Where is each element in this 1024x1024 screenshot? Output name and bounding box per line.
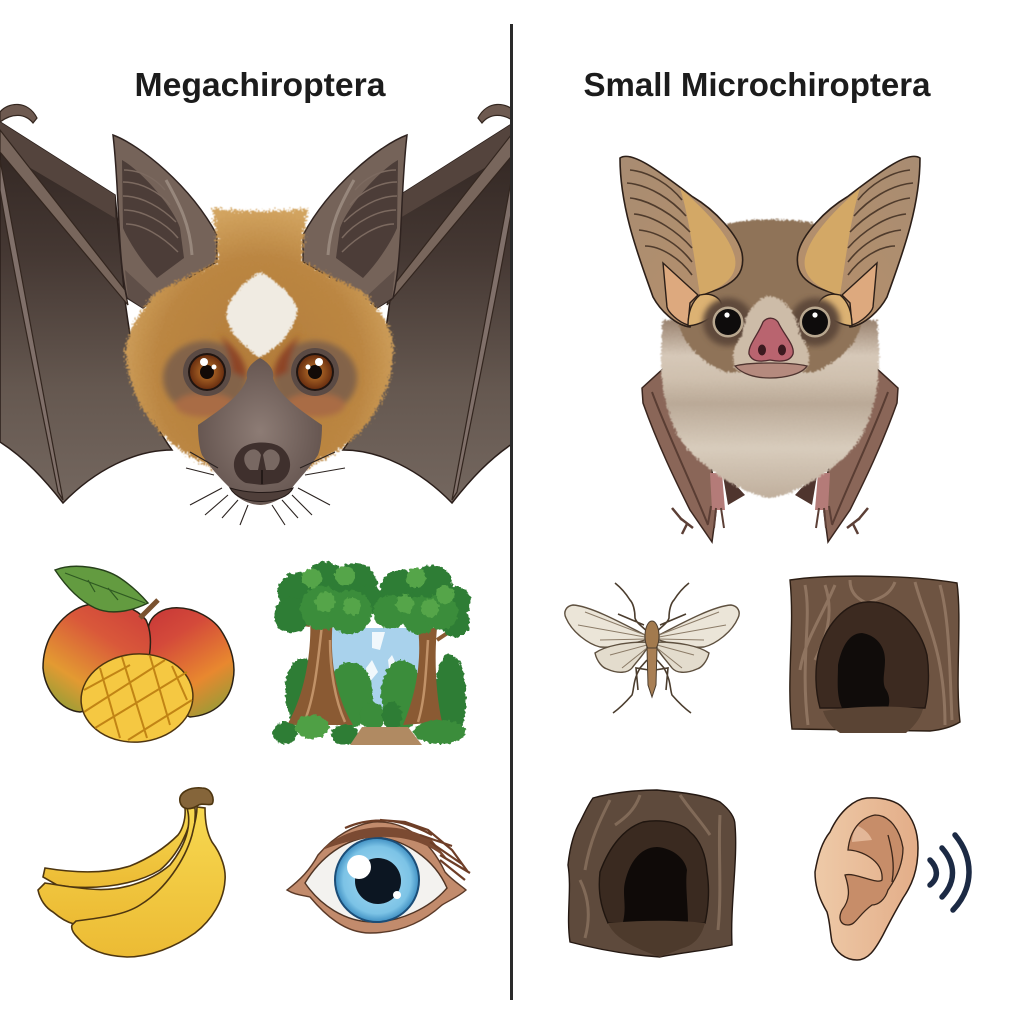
eye highlights: [347, 855, 401, 899]
muzzle fur: [733, 296, 809, 377]
white forehead patch: [226, 272, 297, 358]
left ear: [620, 156, 743, 327]
eye white: [305, 837, 447, 922]
eye sockets: [703, 298, 840, 346]
right ear: [303, 135, 407, 308]
right eye: [291, 348, 339, 396]
illustration: large fruit bat: [0, 104, 515, 525]
icon: tree hollow lower: [568, 790, 736, 957]
icon: blue eye: [287, 820, 470, 933]
body fur: [661, 320, 879, 498]
left wings and legs: [565, 583, 649, 713]
left eye: [712, 306, 744, 338]
illustration: small microbat: [620, 156, 920, 542]
dark cavity: [623, 847, 688, 923]
hollow: [816, 602, 928, 708]
back banana: [43, 808, 193, 887]
upper lashes: [322, 827, 450, 862]
icon: mayfly insect: [565, 583, 739, 713]
left wing: [0, 104, 172, 503]
stem: [140, 600, 158, 618]
foreground shrubs: [273, 715, 466, 745]
front banana: [72, 807, 225, 957]
path: [350, 727, 422, 745]
bark grain: [800, 580, 952, 725]
right wing: [343, 104, 515, 503]
title: Megachiroptera: Megachiroptera: [134, 66, 386, 103]
eyelid: [287, 822, 466, 933]
dark cavity: [838, 633, 889, 708]
right eye: [800, 306, 830, 338]
trunk: [568, 790, 736, 957]
folded right wing and foot: [795, 367, 898, 542]
banana stem: [180, 788, 213, 809]
pupil: [355, 858, 401, 904]
whiskers: [186, 452, 345, 525]
sound waves: [930, 835, 969, 910]
tree trunks: [287, 618, 455, 725]
mango slice: [77, 649, 197, 747]
nose and mouth: [230, 442, 293, 502]
left mango: [43, 603, 150, 712]
outer ear: [815, 798, 918, 960]
head fur: [125, 208, 393, 505]
hollow: [599, 821, 708, 923]
white clouds: [366, 632, 398, 692]
sky: [328, 628, 423, 713]
eye sockets: [163, 335, 357, 417]
right mango: [130, 608, 234, 717]
head: [678, 220, 862, 372]
right ear: [797, 156, 920, 327]
icon: rainforest: [273, 562, 471, 745]
icon: bananas: [38, 788, 225, 957]
hollow floor: [608, 921, 705, 957]
trunk: [790, 576, 960, 731]
insect body: [645, 621, 659, 697]
right wings and legs: [655, 583, 739, 713]
left eye: [183, 348, 231, 396]
hollow floor: [823, 707, 923, 733]
folded left wing and foot: [642, 367, 745, 542]
iris: [335, 838, 419, 922]
bark grain: [580, 795, 720, 938]
pink nose and mouth: [735, 318, 807, 378]
inner folds: [840, 815, 903, 925]
canopy: [274, 562, 471, 637]
icon: tree hollow upper: [790, 576, 960, 733]
left ear: [113, 135, 217, 308]
icon: mango fruit: [43, 566, 234, 747]
leaf: [55, 566, 148, 612]
snout mask: [198, 358, 322, 505]
title: Small Microchiroptera: Small Microchiroptera: [584, 66, 931, 103]
icon: ear with sound waves: [815, 798, 969, 960]
middle banana: [38, 808, 195, 924]
center divider: [510, 24, 513, 1000]
undergrowth bushes behind trunks: [285, 654, 466, 742]
